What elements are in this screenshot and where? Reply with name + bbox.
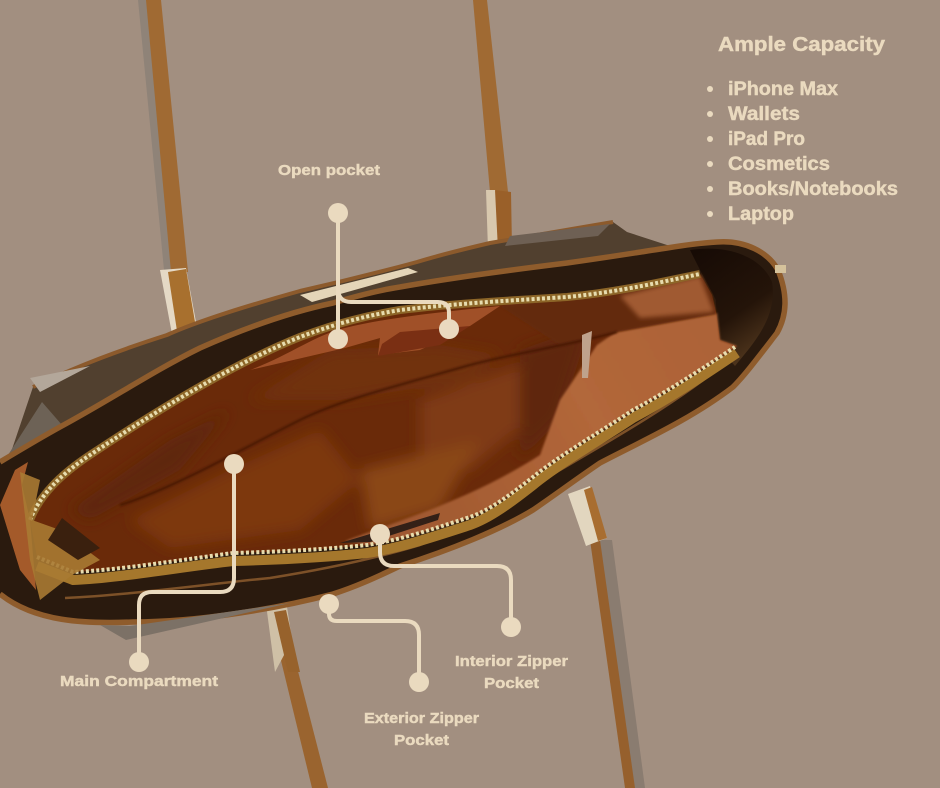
callout: interior zipper pocket xyxy=(370,524,521,637)
light back section xyxy=(505,224,610,246)
label: main compartment: Main Compartment xyxy=(60,673,218,690)
right peach lining xyxy=(345,313,737,545)
zipper end tab xyxy=(20,472,100,600)
capacity list: Books/Notebooks xyxy=(728,179,898,200)
label: interior zipper pocket xyxy=(455,653,568,692)
rear lining band xyxy=(500,274,716,345)
back panel xyxy=(5,222,720,470)
rear zipper xyxy=(30,274,700,520)
grey corner below bag xyxy=(100,603,290,640)
front right handle xyxy=(568,486,645,788)
callout: main compartment xyxy=(129,454,244,672)
label: interior zipper pocket: Pocket xyxy=(484,675,539,692)
bag rim piping xyxy=(0,242,785,623)
lining seam xyxy=(120,332,617,505)
right interior end xyxy=(690,249,773,366)
capacity list: Cosmetics xyxy=(728,154,830,175)
label: exterior zipper pocket xyxy=(364,710,479,749)
callout: open pocket xyxy=(328,203,459,349)
capacity list: iPhone Max xyxy=(728,79,838,100)
front left handle xyxy=(266,600,328,788)
inner lower piping xyxy=(65,352,738,598)
lining folds and highlights xyxy=(70,325,590,548)
front flap plate xyxy=(300,268,418,302)
right side clasp xyxy=(775,265,786,273)
bag lining xyxy=(0,274,737,590)
left lining edge xyxy=(0,462,36,590)
back left handle xyxy=(138,0,196,334)
label: open pocket: Open pocket xyxy=(278,162,380,179)
interior pocket slit xyxy=(340,513,440,543)
open pocket flap xyxy=(250,306,500,370)
capacity list: Wallets xyxy=(728,104,800,125)
front zipper xyxy=(37,347,737,580)
capacity list: iPad Pro xyxy=(728,129,805,150)
back rim piping xyxy=(33,222,613,387)
capacity list: Laptop xyxy=(728,204,794,225)
heading: ample capacity: Ample Capacity xyxy=(718,34,886,56)
callout: exterior zipper pocket xyxy=(319,594,429,692)
care label xyxy=(582,331,592,378)
label: exterior zipper pocket: Exterior Zipper xyxy=(364,710,479,727)
label: interior zipper pocket: Interior Zipper xyxy=(455,653,568,670)
label: exterior zipper pocket: Pocket xyxy=(394,732,449,749)
back right handle xyxy=(473,0,512,250)
bag body outer shell xyxy=(0,242,785,623)
capacity list xyxy=(707,79,898,225)
